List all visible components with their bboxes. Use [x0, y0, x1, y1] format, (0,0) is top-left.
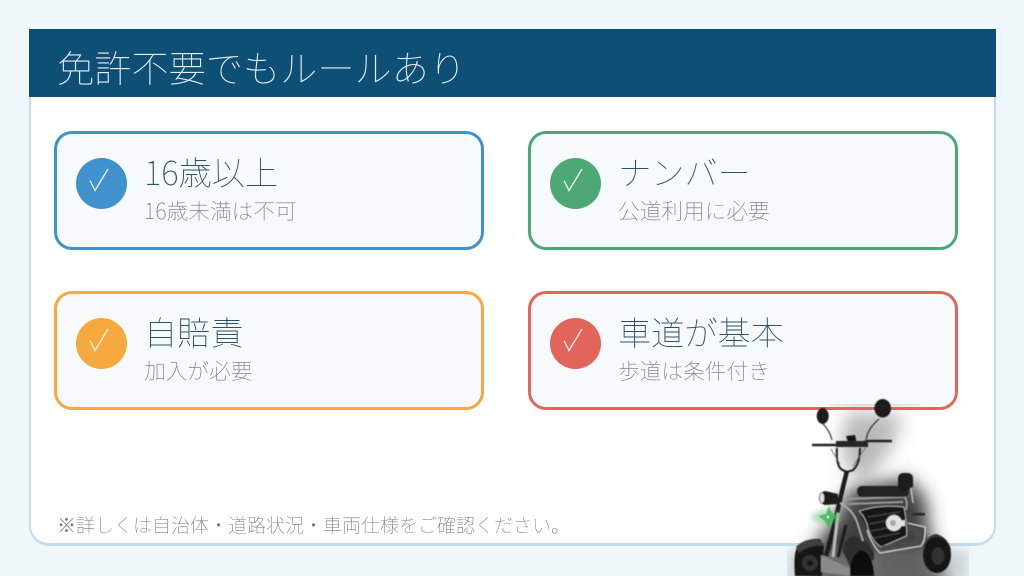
text: 歩道は条件付き: 歩道は条件付き [618, 355, 770, 386]
panel: card 自賠責 [54, 291, 484, 410]
heading: 16歳以上: 16歳以上 [144, 146, 278, 195]
icon: blue check [76, 158, 127, 209]
axle [821, 555, 850, 576]
heading: 自賠責: 自賠責 [144, 306, 244, 355]
steering column [826, 471, 847, 556]
front right wheel [849, 550, 874, 576]
icon: red check [550, 318, 601, 369]
icon: electric mobility scooter photo [787, 398, 969, 576]
panel: card ナンバー [528, 131, 958, 250]
handlebar loop [837, 448, 860, 472]
seat support rails [845, 497, 907, 510]
text: 16歳未満は不可: 16歳未満は不可 [144, 195, 297, 226]
seat [857, 486, 909, 497]
front left wheel [794, 539, 824, 576]
front right fender [843, 536, 874, 566]
emblem [886, 515, 902, 531]
panel: card 車道が基本 [528, 291, 958, 410]
soft shadow [787, 404, 969, 576]
green glint [811, 506, 841, 528]
title bar [29, 29, 996, 97]
icon: green check [550, 158, 601, 209]
text: 公道利用に必要: 公道利用に必要 [618, 195, 770, 226]
heading: 車道が基本: 車道が基本 [618, 306, 784, 355]
icon: orange check [76, 318, 127, 369]
footnote: ※詳しくは自治体・道路状況・車両仕様をご確認ください。 [57, 511, 570, 538]
silver pole [833, 513, 838, 557]
mirrors [817, 408, 829, 424]
panel: card 16歳以上 [54, 131, 484, 250]
title: 免許不要でもルールあり [57, 39, 466, 93]
body panel [859, 506, 906, 548]
text: 加入が必要: 加入が必要 [144, 355, 252, 386]
headlight [819, 491, 838, 505]
heading: ナンバー: ナンバー [618, 146, 751, 195]
handlebar [812, 441, 892, 445]
rear wheel and fender [924, 534, 951, 550]
floor frame [881, 523, 927, 551]
